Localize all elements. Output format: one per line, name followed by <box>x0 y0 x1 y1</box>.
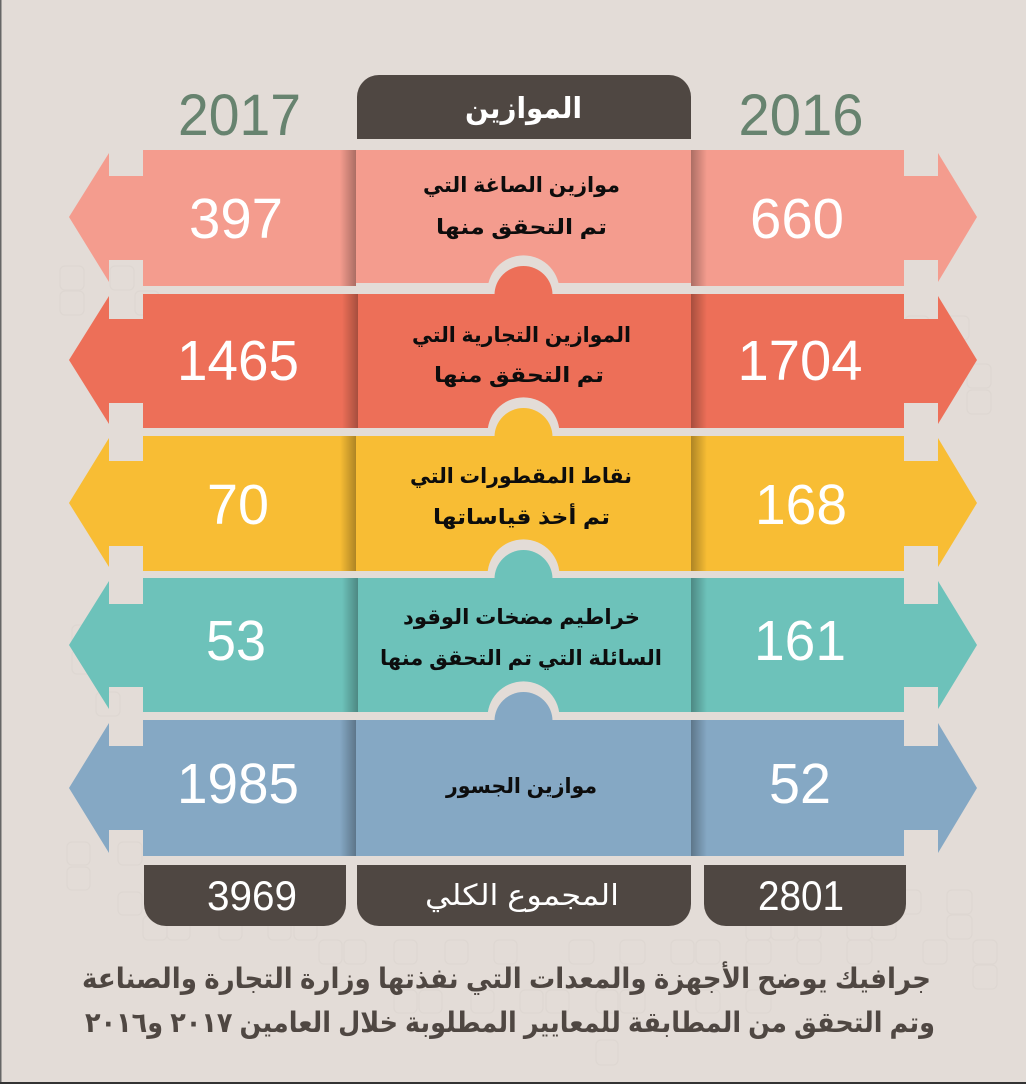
row 1: gold scales: 660 <box>750 187 844 251</box>
row 3: truck scale points: تم أخذ قياساتها <box>433 502 610 529</box>
caption <box>82 961 935 1039</box>
row 4: fuel pump nozzles: السائلة التي تم التحقق منها <box>380 647 662 670</box>
knob between rows 4 and 5 <box>488 681 560 721</box>
row 5: bridge scales: موازين الجسور <box>445 775 597 798</box>
row 2: commercial scales: الموازين التجارية التي <box>412 324 631 347</box>
year heading 2016: 2016 <box>738 83 864 148</box>
table header: الموازين <box>357 75 691 139</box>
total label <box>357 865 691 926</box>
table header: الموازين: الموازين <box>465 93 582 125</box>
total 2017: 3969 <box>207 872 297 919</box>
row 4: fuel pump nozzles: خراطيم مضخات الوقود <box>403 606 640 629</box>
total 2016: 2801 <box>758 872 844 919</box>
row 3: truck scale points <box>69 397 977 571</box>
knob between rows 1 and 2 <box>488 255 560 295</box>
knob between rows 3 and 4 <box>488 539 560 579</box>
row 3: truck scale points: 70 <box>207 473 269 537</box>
row 3: truck scale points: نقاط المقطورات التي <box>410 465 632 488</box>
row 1: gold scales: تم التحقق منها <box>436 216 607 239</box>
row 1: gold scales: 397 <box>189 187 283 251</box>
row 4: fuel pump nozzles: 53 <box>206 609 266 673</box>
row 4: fuel pump nozzles: 161 <box>754 609 846 673</box>
row 1: gold scales: موازين الصاغة التي <box>423 174 620 197</box>
total 2017 <box>144 865 346 926</box>
row 2: commercial scales: تم التحقق منها <box>434 364 604 387</box>
total label: المجموع الكلي <box>425 880 619 913</box>
row 2: commercial scales: 1465 <box>177 329 299 393</box>
row 3: truck scale points: 168 <box>755 473 847 537</box>
row 5: bridge scales <box>69 681 977 856</box>
total 2016 <box>704 865 906 926</box>
row 5: bridge scales: 1985 <box>177 752 299 816</box>
caption: وتم التحقق من المطابقة للمعايير المطلوبة خلال العامين ٢٠١٧ و٢٠١٦ <box>85 1007 935 1039</box>
caption: جرافيك يوضح الأجهزة والمعدات التي نفذتها وزارة التجارة والصناعة <box>82 961 931 995</box>
row 2: commercial scales: 1704 <box>738 329 862 393</box>
year heading 2017: 2017 <box>178 83 301 148</box>
row 5: bridge scales: 52 <box>769 752 831 816</box>
row 4: fuel pump nozzles <box>69 539 977 712</box>
knob between rows 2 and 3 <box>488 397 560 437</box>
row 1: gold scales <box>69 150 977 286</box>
row 2: commercial scales <box>69 255 977 428</box>
